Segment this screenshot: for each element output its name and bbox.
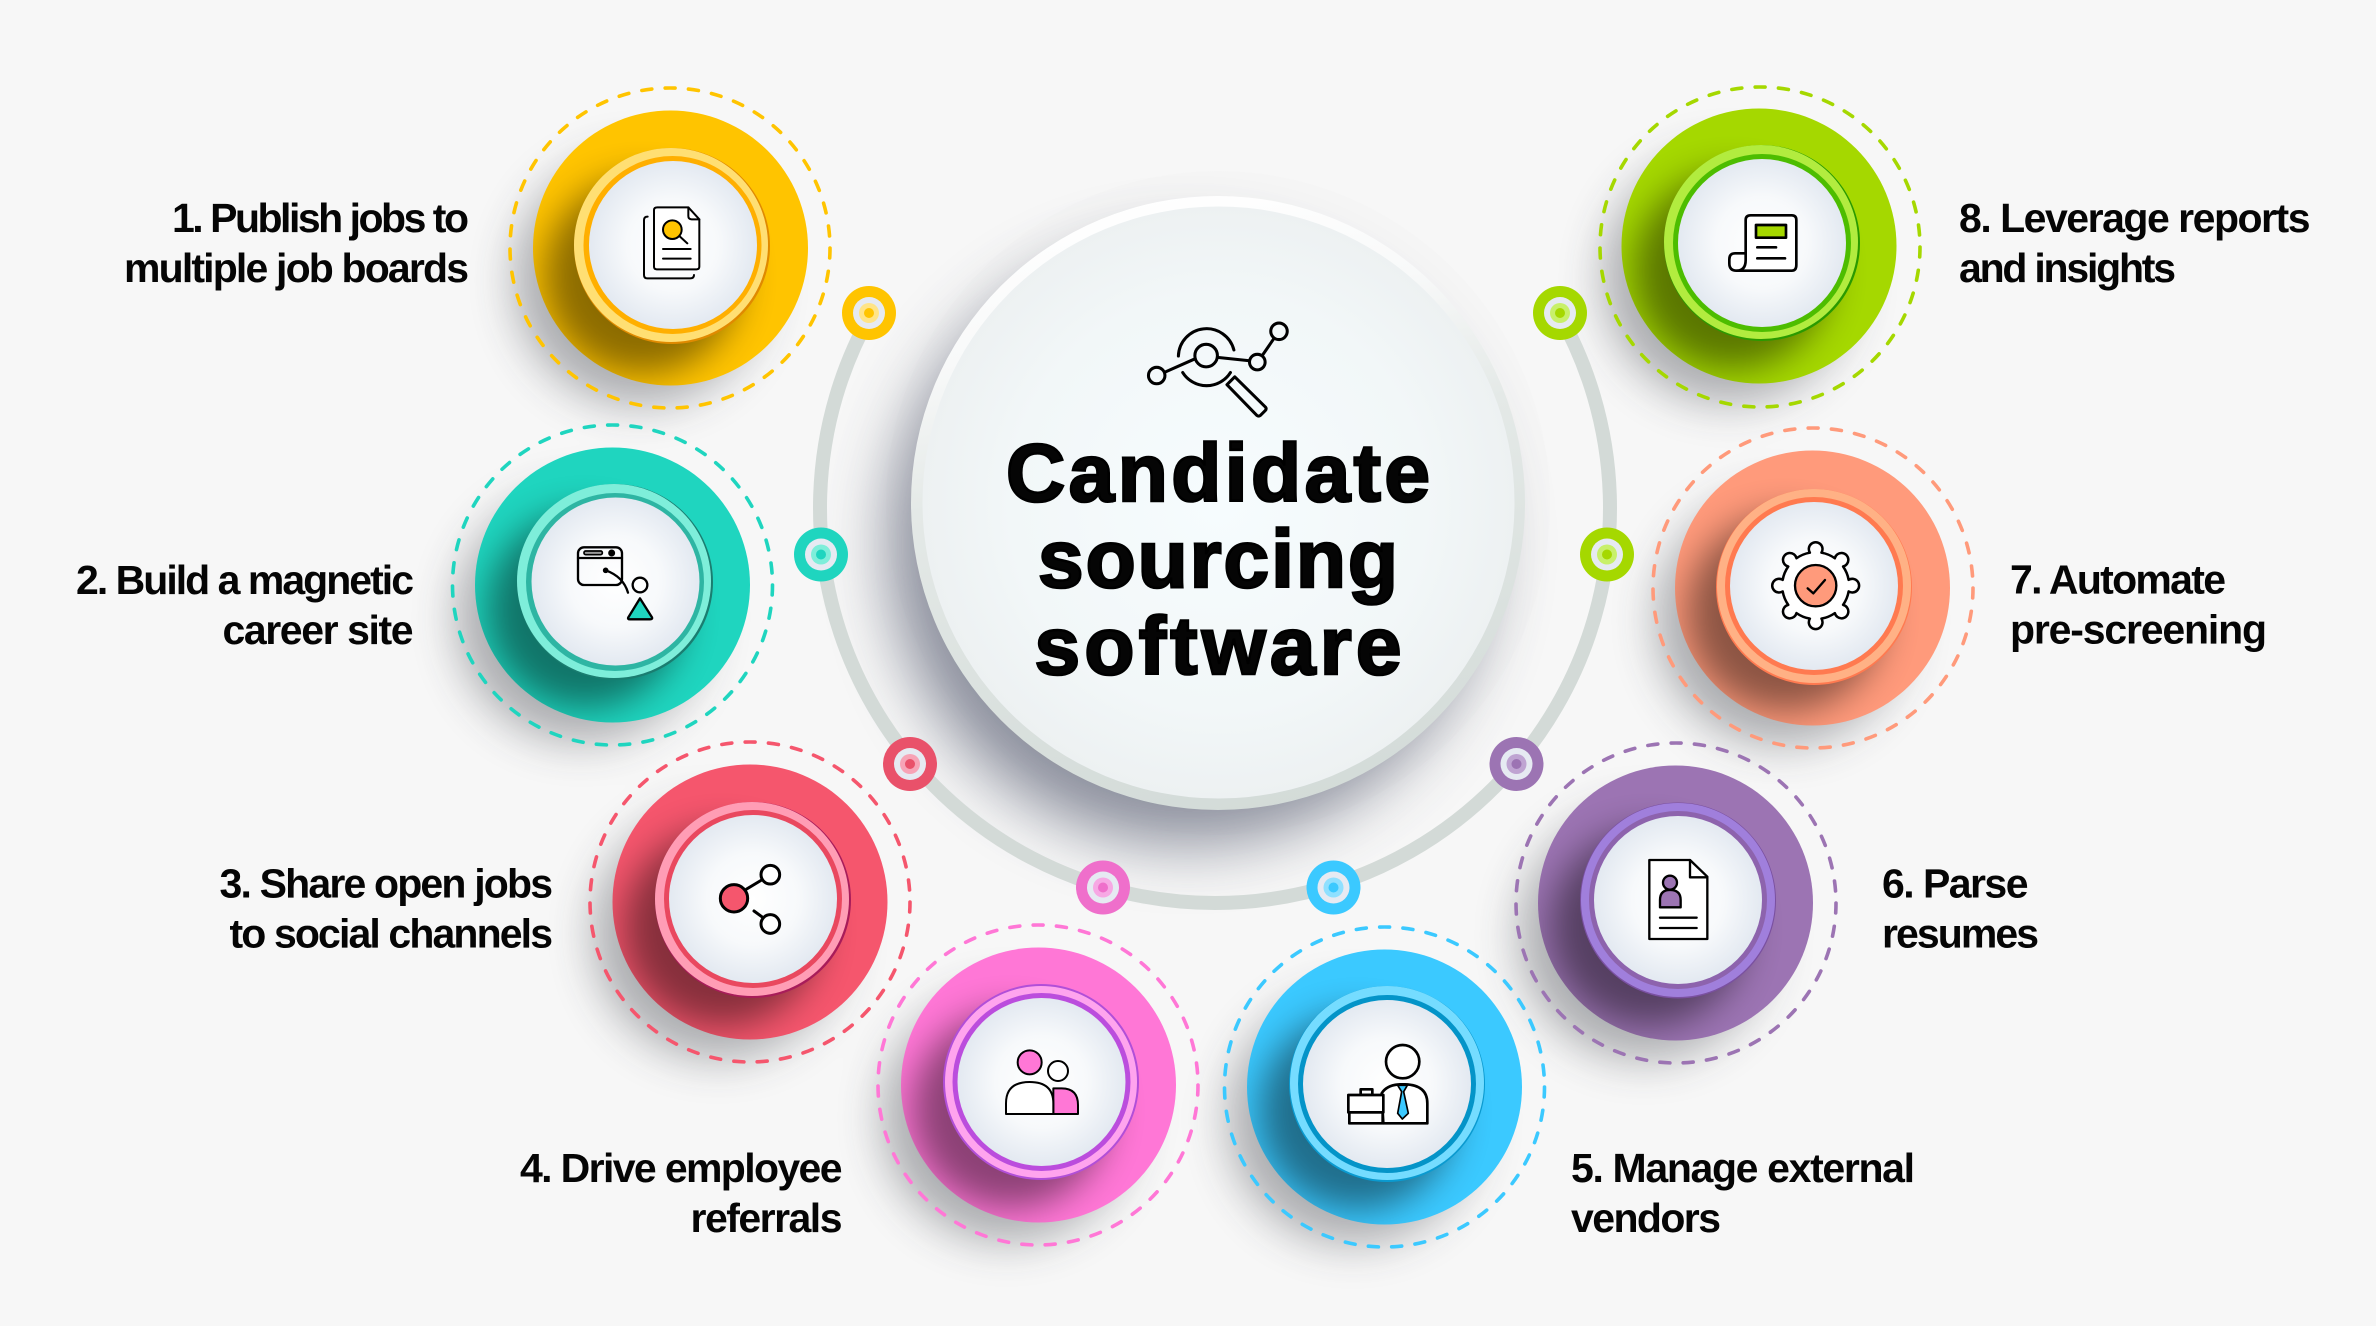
icon: career site: [578, 547, 652, 619]
panel: step 4: [520, 925, 1198, 1245]
panel: step 2: [76, 425, 772, 745]
label: step 1: 1. Publish jobs to: [172, 195, 469, 241]
soft disc shadows on background: [456, 153, 1906, 1244]
label: step 8: 8. Leverage reports: [1959, 195, 2310, 241]
marker 3 red: [883, 737, 937, 791]
marker 7 olive green: [1580, 528, 1634, 582]
label: step 7: [2010, 556, 2267, 652]
centre halo: [886, 171, 1550, 835]
label: step 4: referrals: [690, 1195, 842, 1241]
icon: share nodes: [720, 865, 780, 933]
panel: step 5: [1224, 927, 1915, 1247]
panel: step 3: [220, 742, 910, 1062]
label: step 7: 7. Automate: [2010, 556, 2226, 602]
label: step 8: [1959, 195, 2310, 291]
label: step 1: [124, 195, 469, 291]
icon: document search: [644, 207, 699, 278]
label: step 1: multiple job boards: [124, 245, 469, 291]
icon: report scroll: [1729, 215, 1796, 271]
marker 8 green: [1533, 286, 1587, 340]
marker 4 pink: [1076, 860, 1130, 914]
marker 1 yellow: [842, 286, 896, 340]
label: step 2: 2. Build a magnetic: [76, 557, 414, 603]
label: step 5: 5. Manage external: [1571, 1145, 1915, 1191]
label: step 3: 3. Share open jobs: [220, 860, 553, 906]
label: step 5: [1571, 1145, 1915, 1241]
label: step 7: pre-screening: [2010, 606, 2267, 652]
label: step 3: to social channels: [230, 910, 553, 956]
label: step 2: [76, 557, 414, 653]
title: [1006, 428, 1430, 692]
label: step 6: 6. Parse: [1882, 860, 2028, 906]
icon: vendor with briefcase: [1348, 1045, 1427, 1123]
panel: step 8: [1600, 87, 2310, 407]
panel: centre circle: [911, 196, 1525, 810]
icon: gear with check: [1772, 542, 1859, 629]
title: Candidate: [1006, 428, 1430, 519]
icon: employees: [1006, 1050, 1078, 1114]
label: step 4: 4. Drive employee: [520, 1145, 842, 1191]
connector ring arc: [820, 313, 1610, 903]
panel: step 1: [124, 88, 830, 408]
label: step 3: [220, 860, 553, 956]
label: step 6: resumes: [1882, 910, 2039, 956]
panel: step 7: [1653, 428, 2267, 748]
label: step 6: [1882, 860, 2039, 956]
label: step 2: career site: [222, 607, 414, 653]
centre shadow: [888, 245, 1488, 845]
panel: step 6: [1516, 743, 2039, 1063]
icon: resume: [1649, 860, 1707, 939]
label: step 8: and insights: [1959, 245, 2176, 291]
title: sourcing: [1038, 514, 1398, 605]
label: step 4: [520, 1145, 842, 1241]
icon: analytics magnifier: [1148, 323, 1287, 416]
marker 2 teal: [794, 528, 848, 582]
marker 6 purple: [1490, 737, 1544, 791]
title: software: [1034, 601, 1402, 692]
marker 5 blue: [1306, 860, 1360, 914]
label: step 5: vendors: [1571, 1195, 1721, 1241]
